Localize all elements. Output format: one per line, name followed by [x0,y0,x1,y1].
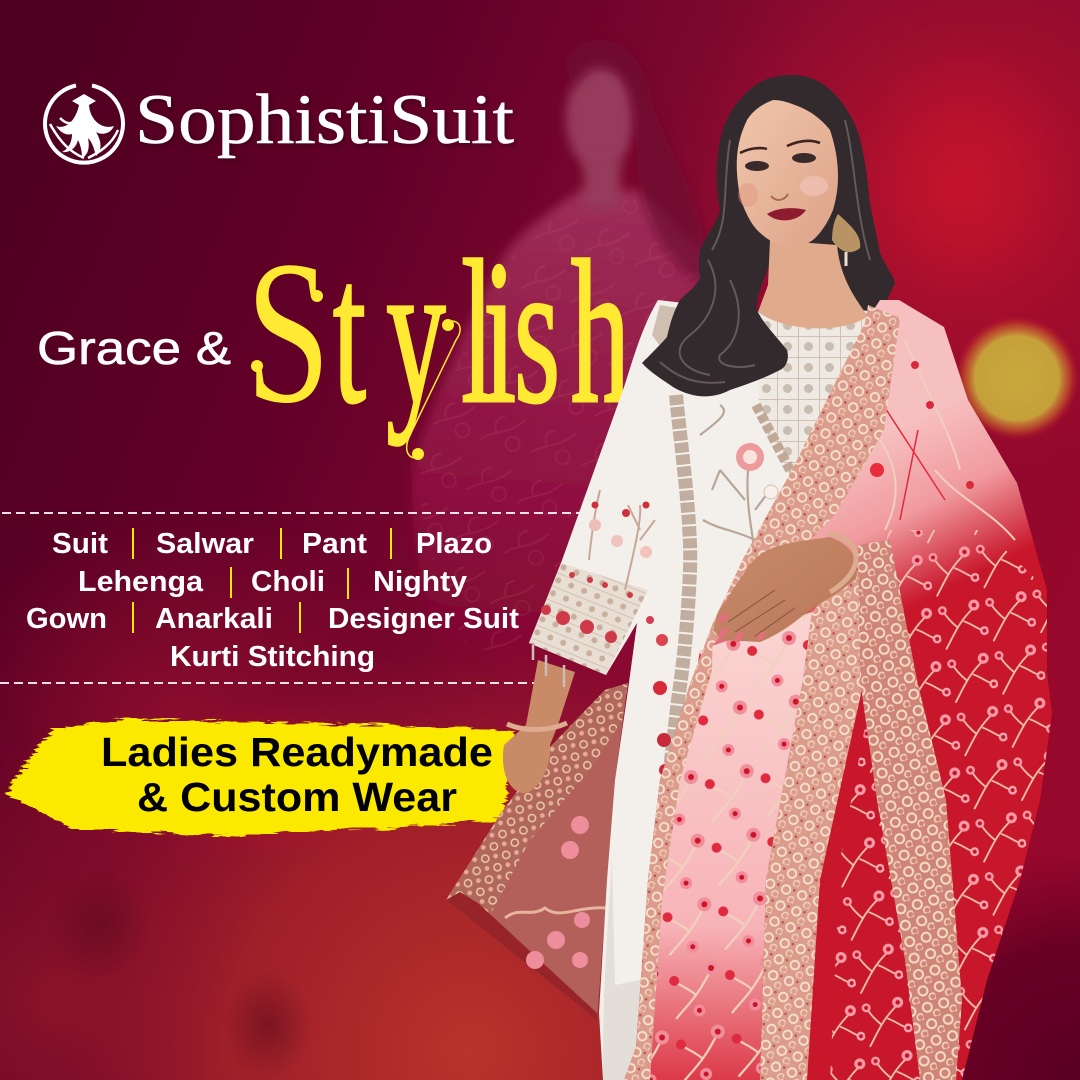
headline: Stylish: tylish [333,220,630,446]
service row 3: Anarkali [155,603,273,635]
headline: Grace &: Grace & [37,322,231,374]
ghost model photo [412,40,720,690]
services list [26,528,519,673]
service row 1: Plazo [416,528,492,560]
bangles [507,533,856,730]
gold band right [858,540,962,1080]
brush banner [4,719,516,836]
dupatta base [624,300,1052,1080]
service row 1: Salwar [156,528,254,560]
dupatta upper embroidery [870,340,1015,540]
service row 3: Gown [26,603,107,635]
logo [45,81,514,163]
dupatta pink panel [640,612,812,1080]
banner text: Ladies Readymade [101,729,493,775]
logo emblem [45,86,123,163]
service row 2: Nighty [373,566,467,598]
gold band diagonal [689,305,900,687]
sleeve cuff [529,563,648,675]
yellow separators [133,528,391,633]
hair highlights [660,120,870,383]
service row 2: Lehenga [78,566,204,598]
kurta floral embroidery [646,405,778,776]
sleeve embroidery [589,490,655,590]
service row 1: Pant [302,528,367,560]
banner text [101,729,493,820]
shoulder trim [652,305,690,360]
pink panel embroidery [640,612,812,1080]
red panel embroidery [830,530,1052,1080]
gold band centre [760,560,864,1080]
kurta [529,300,880,1080]
neck [758,240,868,328]
service row 1 [52,528,492,560]
service row 2: Choli [251,566,325,598]
service row 3: Designer Suit [328,603,519,635]
kurta yoke [754,312,872,475]
service row 1: Suit [52,528,108,560]
model [446,75,1052,1080]
yoke border [756,405,790,470]
bokeh light [955,316,1079,440]
headline [37,219,630,460]
face [737,100,838,247]
earring [832,214,860,266]
headline: Stylish: S [246,219,330,446]
dashed dividers [0,513,582,683]
cuff flowers [541,572,633,643]
hand on belly [713,537,857,642]
hair silhouette [642,75,895,396]
trailing dupatta [446,683,628,1020]
service row 4: Kurti Stitching [170,641,375,673]
banner text: & Custom Wear [137,774,457,820]
service row 3 [26,603,519,635]
cuff tassels [533,645,564,687]
kurta centre trim [670,395,690,770]
fingernails [716,611,767,644]
gold strip left [624,623,713,1080]
service row 2 [78,566,467,598]
kurta hem fold shade [603,860,652,1080]
facial features [738,141,828,220]
brand name: SophistiSuit [135,81,514,159]
forearm and hand [503,660,575,793]
